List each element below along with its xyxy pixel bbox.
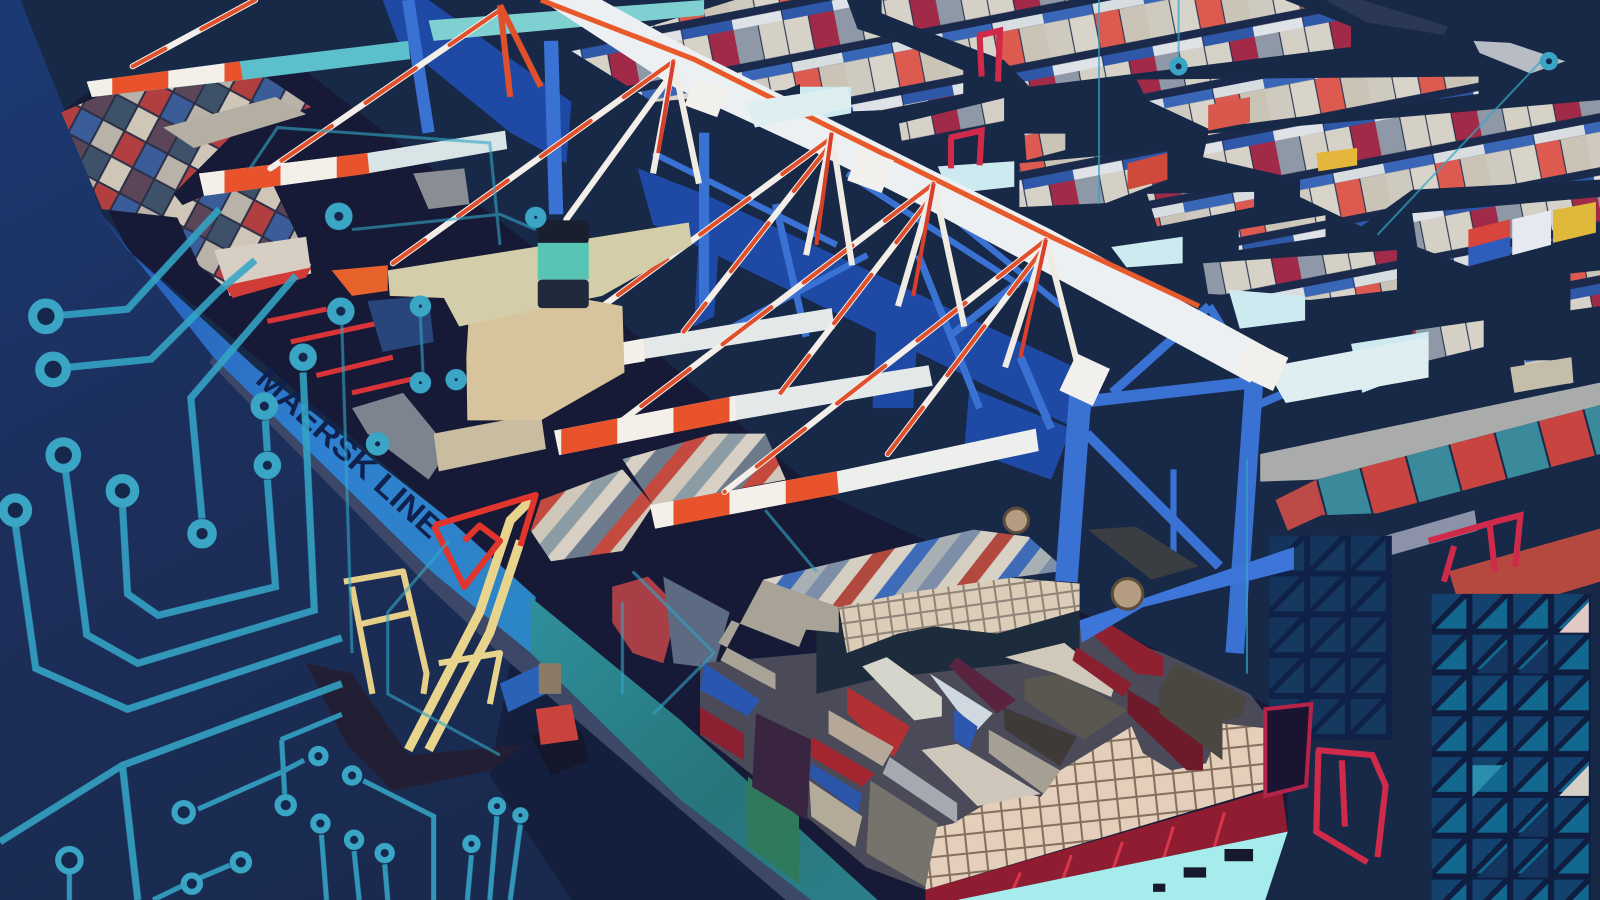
trace group: left circuit	[0, 209, 342, 900]
containers: backing mass	[700, 622, 1278, 890]
crane cabins with logo panels	[685, 77, 1288, 406]
deck machinery by forward bridge	[352, 296, 546, 480]
rear stack container tops	[866, 781, 938, 887]
stern lashing bridge	[1265, 704, 1311, 796]
container yard: right middle	[1260, 357, 1600, 622]
red band streaks	[1010, 812, 1224, 896]
containers: forward stack under cranes	[531, 434, 786, 668]
mid stack striped tops	[763, 530, 1066, 610]
yard carriers and gear, top right	[1326, 0, 1565, 73]
carrier: yard small	[949, 131, 982, 168]
triangle grid: dark block	[1269, 536, 1392, 740]
dark water beside stern	[490, 663, 811, 900]
crane boom ends: pale sections	[745, 87, 1429, 403]
barge	[306, 663, 526, 791]
ship funnel	[538, 220, 589, 308]
red straddle carriers	[949, 31, 1520, 862]
pale triangles	[1559, 602, 1589, 633]
containers: forward deck stacks	[61, 77, 311, 298]
deck red rails	[267, 309, 541, 464]
hull lettering: MAERSK LINE	[249, 360, 449, 545]
dimmed cells	[1477, 643, 1548, 878]
mid stack shadow	[816, 602, 1080, 694]
crane apex towers	[500, 5, 1080, 372]
trace group: upper and ship lines	[250, 128, 816, 755]
crane wheels	[1004, 508, 1143, 609]
hull: blue side	[97, 209, 536, 653]
crane stay cables	[133, 0, 1046, 492]
crane lower sill	[1080, 547, 1294, 643]
hull: stern light blue	[957, 832, 1288, 900]
boom 4	[554, 365, 933, 455]
ship deck	[61, 71, 1288, 900]
hull rust patch	[748, 777, 799, 884]
boom 1	[87, 41, 410, 97]
hull: red band at stern	[926, 787, 1288, 900]
tugboat	[500, 663, 590, 776]
triangle grid: bright block	[1432, 594, 1591, 900]
boom 5	[650, 429, 1039, 529]
water	[0, 0, 786, 900]
containers: mid stack	[700, 530, 1080, 847]
carrier: upper right	[1429, 515, 1520, 582]
trace group: bottom circuit	[69, 714, 520, 900]
crane structure: deep blue girders	[383, 0, 1097, 480]
ship superstructure	[332, 220, 692, 420]
boom 3	[467, 308, 835, 392]
pale crane machinery on yard side	[800, 87, 1429, 393]
carrier: yard	[978, 31, 1000, 82]
crane main girder	[541, 0, 1276, 383]
mid stack stepped containers	[718, 580, 839, 690]
rear stack cream faces	[926, 723, 1278, 890]
crane booms	[87, 41, 1039, 529]
crane walkway deck	[1088, 527, 1199, 580]
crane legs: bright blue trusses	[408, 0, 1357, 653]
carrier: lower right	[1316, 750, 1386, 862]
deck containers below first crane	[413, 168, 469, 209]
yard accent containers	[1128, 97, 1596, 266]
container yard: upper right	[571, 0, 1600, 384]
boom 2	[199, 131, 507, 196]
hull: teal side	[531, 597, 878, 900]
top teal boom	[429, 0, 704, 41]
containers: rear stack	[829, 620, 1278, 890]
hull shadow strip	[209, 357, 811, 900]
mid stack cream face	[839, 577, 1080, 653]
yellow floating crane	[344, 495, 536, 750]
